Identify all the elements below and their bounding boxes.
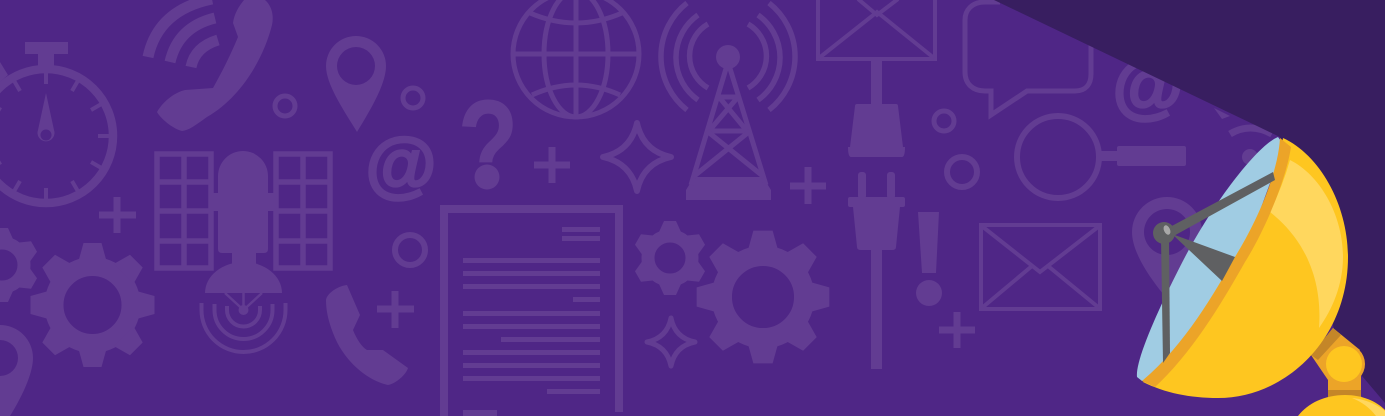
icon: power plug bottom bbox=[848, 172, 905, 369]
icon: at sign left: @ bbox=[365, 124, 437, 205]
icon: magnifying glass bbox=[1017, 116, 1186, 198]
icon: four point sparkle small bbox=[647, 318, 695, 366]
dish blue bowl bbox=[1137, 137, 1284, 381]
icon: plus signs bbox=[99, 147, 975, 348]
icon: envelope lower bbox=[981, 225, 1100, 309]
icon: power plug top bbox=[848, 61, 905, 157]
icon: envelope top bbox=[818, 0, 935, 59]
icon: telephone handset with signal waves bbox=[148, 0, 273, 131]
icon: at sign right: @ bbox=[1112, 45, 1184, 126]
icon: gears center bbox=[632, 221, 829, 363]
icon: four point sparkle large bbox=[603, 123, 671, 191]
icon: radio tower bbox=[661, 3, 795, 200]
icon: globe bbox=[513, 0, 639, 117]
dish orange rim bbox=[1142, 138, 1291, 387]
icon: gears left bbox=[0, 228, 154, 367]
icon: partial map pin bottom left bbox=[0, 325, 33, 416]
icon: stopwatch bbox=[0, 42, 113, 203]
icon: speech bubble bbox=[965, 2, 1091, 115]
dish yellow shell bbox=[1143, 138, 1348, 398]
icon: small rings bbox=[275, 88, 977, 265]
dish highlight bbox=[1270, 160, 1343, 328]
icon: question mark: ? bbox=[458, 74, 518, 217]
dish feed struts bbox=[1153, 172, 1275, 363]
icon: satellite bbox=[156, 151, 331, 352]
satellite dish bbox=[1137, 137, 1385, 416]
dark corner shape bbox=[994, 0, 1385, 403]
icon: partial shape behind dish bbox=[1214, 108, 1272, 165]
icon: telephone handset lower bbox=[326, 285, 408, 385]
icon: text document bbox=[444, 209, 619, 416]
icon: exclamation mark bbox=[916, 212, 942, 306]
icon: map pin behind dish bbox=[1132, 197, 1202, 302]
dish base dome bbox=[1298, 395, 1385, 416]
icon: map pin bbox=[326, 36, 386, 132]
dish arm bbox=[1311, 328, 1365, 398]
